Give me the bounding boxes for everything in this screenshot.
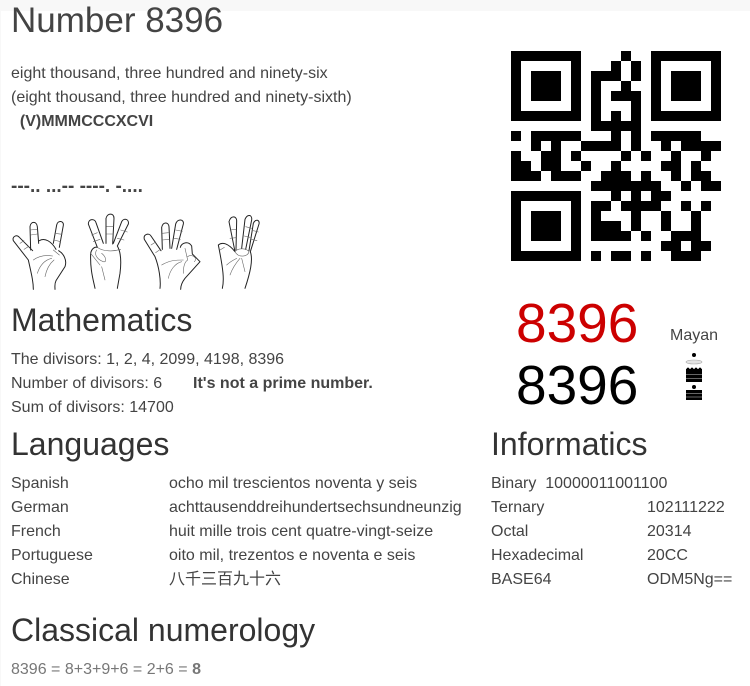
heading: Informatics: Informatics (491, 426, 647, 462)
Mayan label: Mayan (670, 327, 718, 344)
title: Number 8396 (11, 1, 223, 40)
languages table: ocho mil trescientos noventa y seis achttausenddreihundertsechsundneunzig huit mille trois cent quatre-vingt-seize oito mil, trezentos e noventa e seis 八千三百九十六 (169, 475, 462, 588)
heading: Languages: Languages (11, 426, 169, 462)
big black number: 8396 (516, 354, 638, 416)
languages table: Spanish German French Portuguese Chinese (11, 475, 93, 588)
icon: QR code (511, 51, 721, 261)
divisors text: It's not a prime number. (193, 375, 373, 392)
left edge strip (0, 0, 1, 686)
number names and roman numeral: eight thousand, three hundred and ninety-six (eight thousand, three hundred and ninety-sixth) (V)MMMCCCXCVI (11, 65, 352, 130)
divisors text: The divisors: 1, 2, 4, 2099, 4198, 8396 Number of divisors: 6 Sum of divisors: 14700 (11, 351, 284, 416)
top band (0, 0, 750, 11)
informatics table: Binary 10000011001100 Ternary Octal Hexadecimal BASE64 (491, 475, 667, 588)
big red number: 8396 (516, 292, 638, 354)
icon: Mayan numeral (686, 353, 702, 400)
morse code: ---.. ...-- ----. -.... (11, 176, 143, 197)
languages table (11, 475, 462, 588)
informatics table: 102111222 20314 20CC ODM5Ng== (647, 499, 732, 588)
numerology sum: 8396 = 8+3+9+6 = 2+6 = 8 (11, 661, 201, 678)
heading: Mathematics: Mathematics (11, 302, 192, 338)
heading: Classical numerology: Classical numerology (11, 612, 315, 648)
icon: sign language hands (12, 214, 260, 290)
